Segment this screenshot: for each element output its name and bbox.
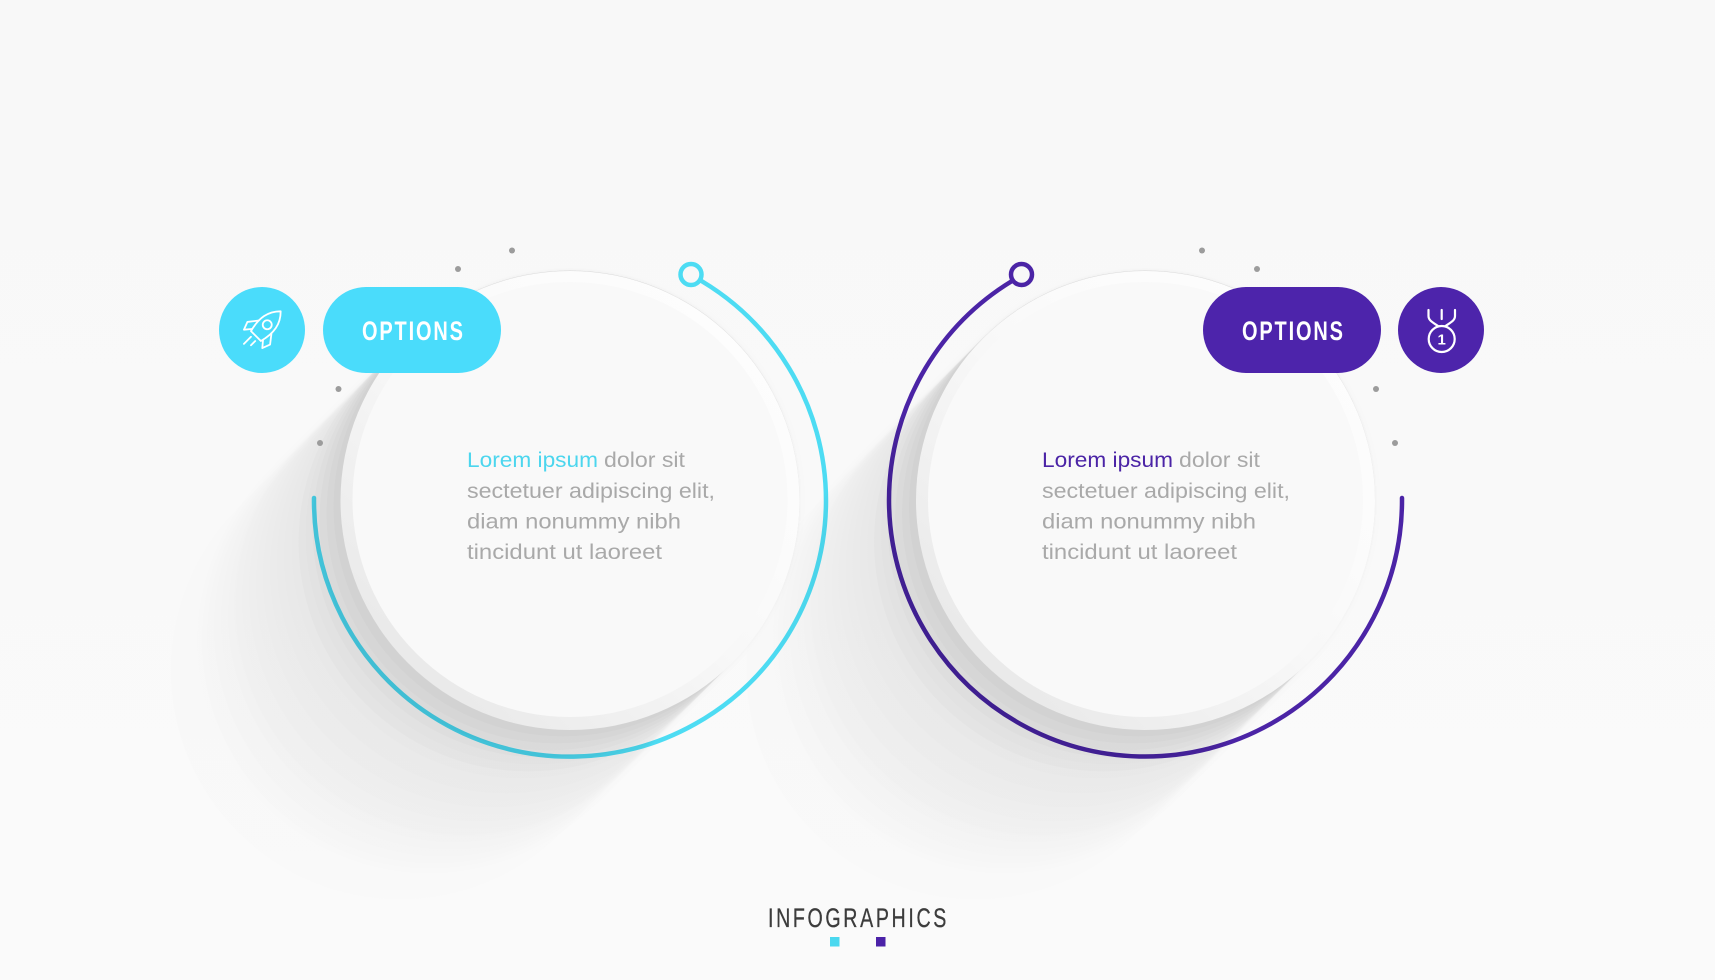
text block: right: tincidunt ut laoreet	[1042, 540, 1237, 564]
icon: rocket badge	[219, 287, 305, 373]
text block: left: Lorem ipsum	[467, 448, 598, 472]
button: left options pill: OPTIONS	[362, 316, 463, 347]
button: right options pill: OPTIONS	[1242, 316, 1343, 347]
long shadow: right circle	[976, 500, 1146, 670]
text block: right: diam nonummy nibh	[1042, 510, 1256, 534]
text block: right: Lorem ipsum	[1042, 448, 1173, 472]
button: left options pill	[323, 287, 501, 373]
text block: left	[467, 448, 715, 564]
decorative dots: right	[1199, 248, 1398, 446]
title: infographics: INFOGRAPHICS	[768, 903, 946, 933]
text block: right: sectetuer adipiscing elit,	[1042, 479, 1290, 503]
text block: left: tincidunt ut laoreet	[467, 540, 662, 564]
text block: left: diam nonummy nibh	[467, 510, 681, 534]
text block: left: dolor sit	[604, 448, 685, 472]
panel: right circle	[916, 271, 1375, 730]
text block: left: sectetuer adipiscing elit,	[467, 479, 715, 503]
button: right options pill	[1203, 287, 1381, 373]
text block: right: dolor sit	[1179, 448, 1260, 472]
ring: right purple arc with node	[889, 264, 1402, 757]
icon: medal badge: 1	[1438, 332, 1446, 348]
long shadow: left circle	[400, 500, 570, 670]
panel: left circle	[340, 271, 800, 730]
icon: medal badge	[1398, 287, 1484, 373]
ring: left cyan arc with node	[314, 264, 826, 757]
text block: right	[1042, 448, 1290, 564]
legend squares	[830, 937, 886, 946]
decorative dots: left	[317, 248, 515, 446]
